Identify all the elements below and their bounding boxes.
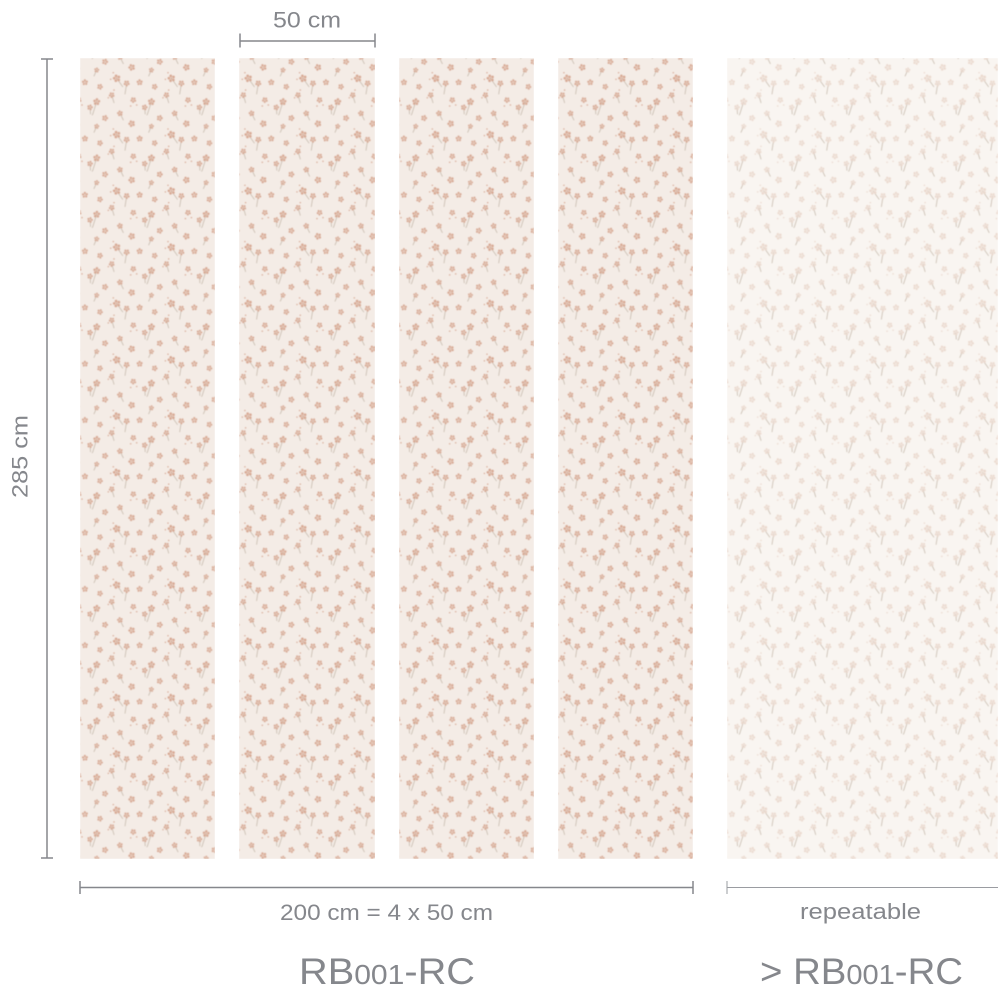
repeatable dimension line	[727, 881, 998, 894]
panel 2: floral wallpaper strip	[239, 58, 375, 859]
total width dimension line	[80, 881, 693, 894]
panel 1: floral wallpaper strip	[80, 58, 215, 859]
repeat product code: > RB001-RC	[760, 951, 963, 992]
panel 4: floral wallpaper strip	[558, 58, 693, 859]
height label: 285 cm	[8, 415, 32, 498]
product code: RB001-RC	[299, 951, 475, 992]
repeatable label: repeatable	[800, 899, 921, 924]
panel 3: floral wallpaper strip	[399, 58, 534, 859]
total width label: 200 cm = 4 x 50 cm	[280, 900, 493, 925]
height dimension line	[41, 59, 53, 858]
panel 5: pale repeatable wallpaper section	[727, 58, 998, 859]
panel width label: 50 cm	[273, 8, 341, 32]
panel width dimension line	[240, 34, 375, 48]
